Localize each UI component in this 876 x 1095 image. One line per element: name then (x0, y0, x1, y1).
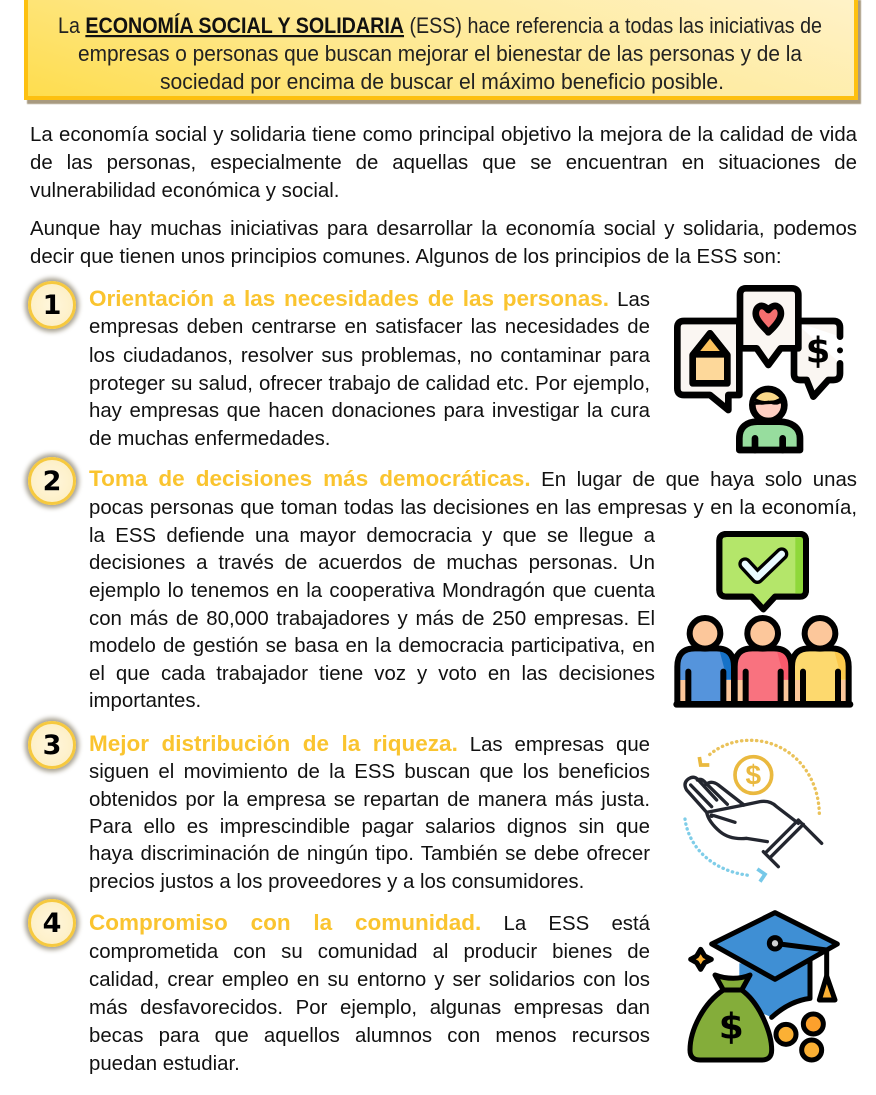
principle 1 text: hay empresas que hacen donaciones para investigar la cura (89, 400, 650, 422)
principle 4 text: becas para que aquellos alumnos con menos recursos (89, 1025, 650, 1047)
title banner (24, 0, 858, 100)
principle 2 text: modelo de gestión se basa en la democracia participativa, en (89, 635, 655, 657)
intro paragraph 2: decir que tienen unos principios comunes. Algunos de los principios de la ESS son: (30, 246, 782, 268)
principle 4 text: calidad, crear empleo en su entorno y ser solidarios con los (89, 969, 650, 991)
principle 2 text: decisiones a través de acuerdos de muchas personas. Un (89, 552, 655, 574)
principle 3 text: haya discriminación de ningún tipo. También se debe ofrecer (89, 843, 650, 865)
intro paragraph 1: La economía social y solidaria tiene como principal objetivo la mejora de la calidad de vida (30, 124, 857, 146)
principle 2 text: la ESS defiende una mayor democracia y que se llegue a (89, 525, 655, 547)
principle 4 text (89, 910, 650, 1075)
principle 3 text (89, 731, 650, 893)
principle 2 text: pocas personas que toman todas las decisiones en las empresas y en la economía, (89, 497, 857, 519)
principle 4 text: puedan estudiar. (89, 1053, 240, 1075)
principle 1 text: proteger su salud, ofrecer trabajo de calidad etc. Por ejemplo, (89, 373, 650, 395)
principle 4 text: comprometida con su comunidad al producir bienes de (89, 941, 650, 963)
icon glyph: dollar sign: $ (806, 330, 830, 371)
principle 1 text: los ciudadanos, resolver sus problemas, no contaminar para (89, 345, 650, 367)
number badge 3 (28, 721, 76, 769)
principle 4 text: más desfavorecidos. Por ejemplo, algunas empresas dan (89, 997, 650, 1019)
number badge 2: 2 (43, 466, 61, 497)
principle 2 text: el que cada trabajador tiene voz y voto en las decisiones (89, 663, 655, 685)
icon: hand with coin and circular arrows (683, 738, 824, 883)
principle 1 text: empresas deben centrarse en satisfacer las necesidades de (89, 316, 650, 338)
intro paragraph 1: de las personas, especialmente de aquellas que se encuentran en situaciones de (30, 152, 857, 174)
title banner: La ECONOMÍA SOCIAL Y SOLIDARIA (ESS) hace referencia a todas las iniciativas de (58, 13, 822, 38)
number badge 4: 4 (43, 908, 61, 939)
intro paragraph 2: Aunque hay muchas iniciativas para desarrollar la economía social y solidaria, podemos (30, 218, 857, 240)
icon: speech bubbles with needs and person (674, 285, 844, 454)
number badge 2 (28, 457, 76, 505)
title banner: empresas o personas que buscan mejorar el bienestar de las personas y de la (78, 41, 803, 66)
principle 2 text: importantes. (89, 690, 201, 712)
intro paragraph 2 (30, 218, 857, 268)
icon: graduation cap, money bag and coins (688, 910, 840, 1062)
number badge 3: 3 (43, 730, 61, 761)
number badge 1: 1 (43, 290, 61, 321)
principle 2 text: con más de 80,000 trabajadores y más de 250 empresas. El (89, 608, 655, 630)
principle 3 text: siguen el movimiento de la ESS buscan que los beneficios (89, 761, 650, 783)
icon glyph: bag dollar: $ (719, 1007, 744, 1048)
principle 2 text: Toma de decisiones más democráticas. En lugar de que haya solo unas (89, 466, 857, 491)
intro paragraph 1 (30, 124, 857, 202)
principle 3 text: Para ello es imprescindible pagar salarios dignos sin que (89, 816, 650, 838)
principle 3 text: Mejor distribución de la riqueza. Las empresas que (89, 731, 650, 756)
principle 2 text (89, 466, 857, 712)
icon: team voting with check mark (673, 531, 854, 708)
principle 3 text: precios justos a los proveedores y a los consumidores. (89, 871, 584, 893)
principle 1 text: de muchas enfermedades. (89, 428, 330, 450)
principle 1 text (89, 286, 650, 450)
principle 3 text: obtenidos por la empresa se repartan de manera más justa. (89, 789, 650, 811)
number badge 1 (28, 281, 76, 329)
icon glyph: coin dollar: $ (746, 760, 762, 791)
principle 4 text: Compromiso con la comunidad. La ESS está (89, 910, 650, 935)
number badge 4 (28, 899, 76, 947)
principle 1 text: Orientación a las necesidades de las personas. Las (89, 286, 650, 311)
principle 2 text: ejemplo lo tenemos en la cooperativa Mondragón que cuenta (89, 580, 655, 602)
intro paragraph 1: vulnerabilidad económica y social. (30, 180, 339, 202)
title banner: sociedad por encima de buscar el máximo beneficio posible. (160, 69, 724, 94)
